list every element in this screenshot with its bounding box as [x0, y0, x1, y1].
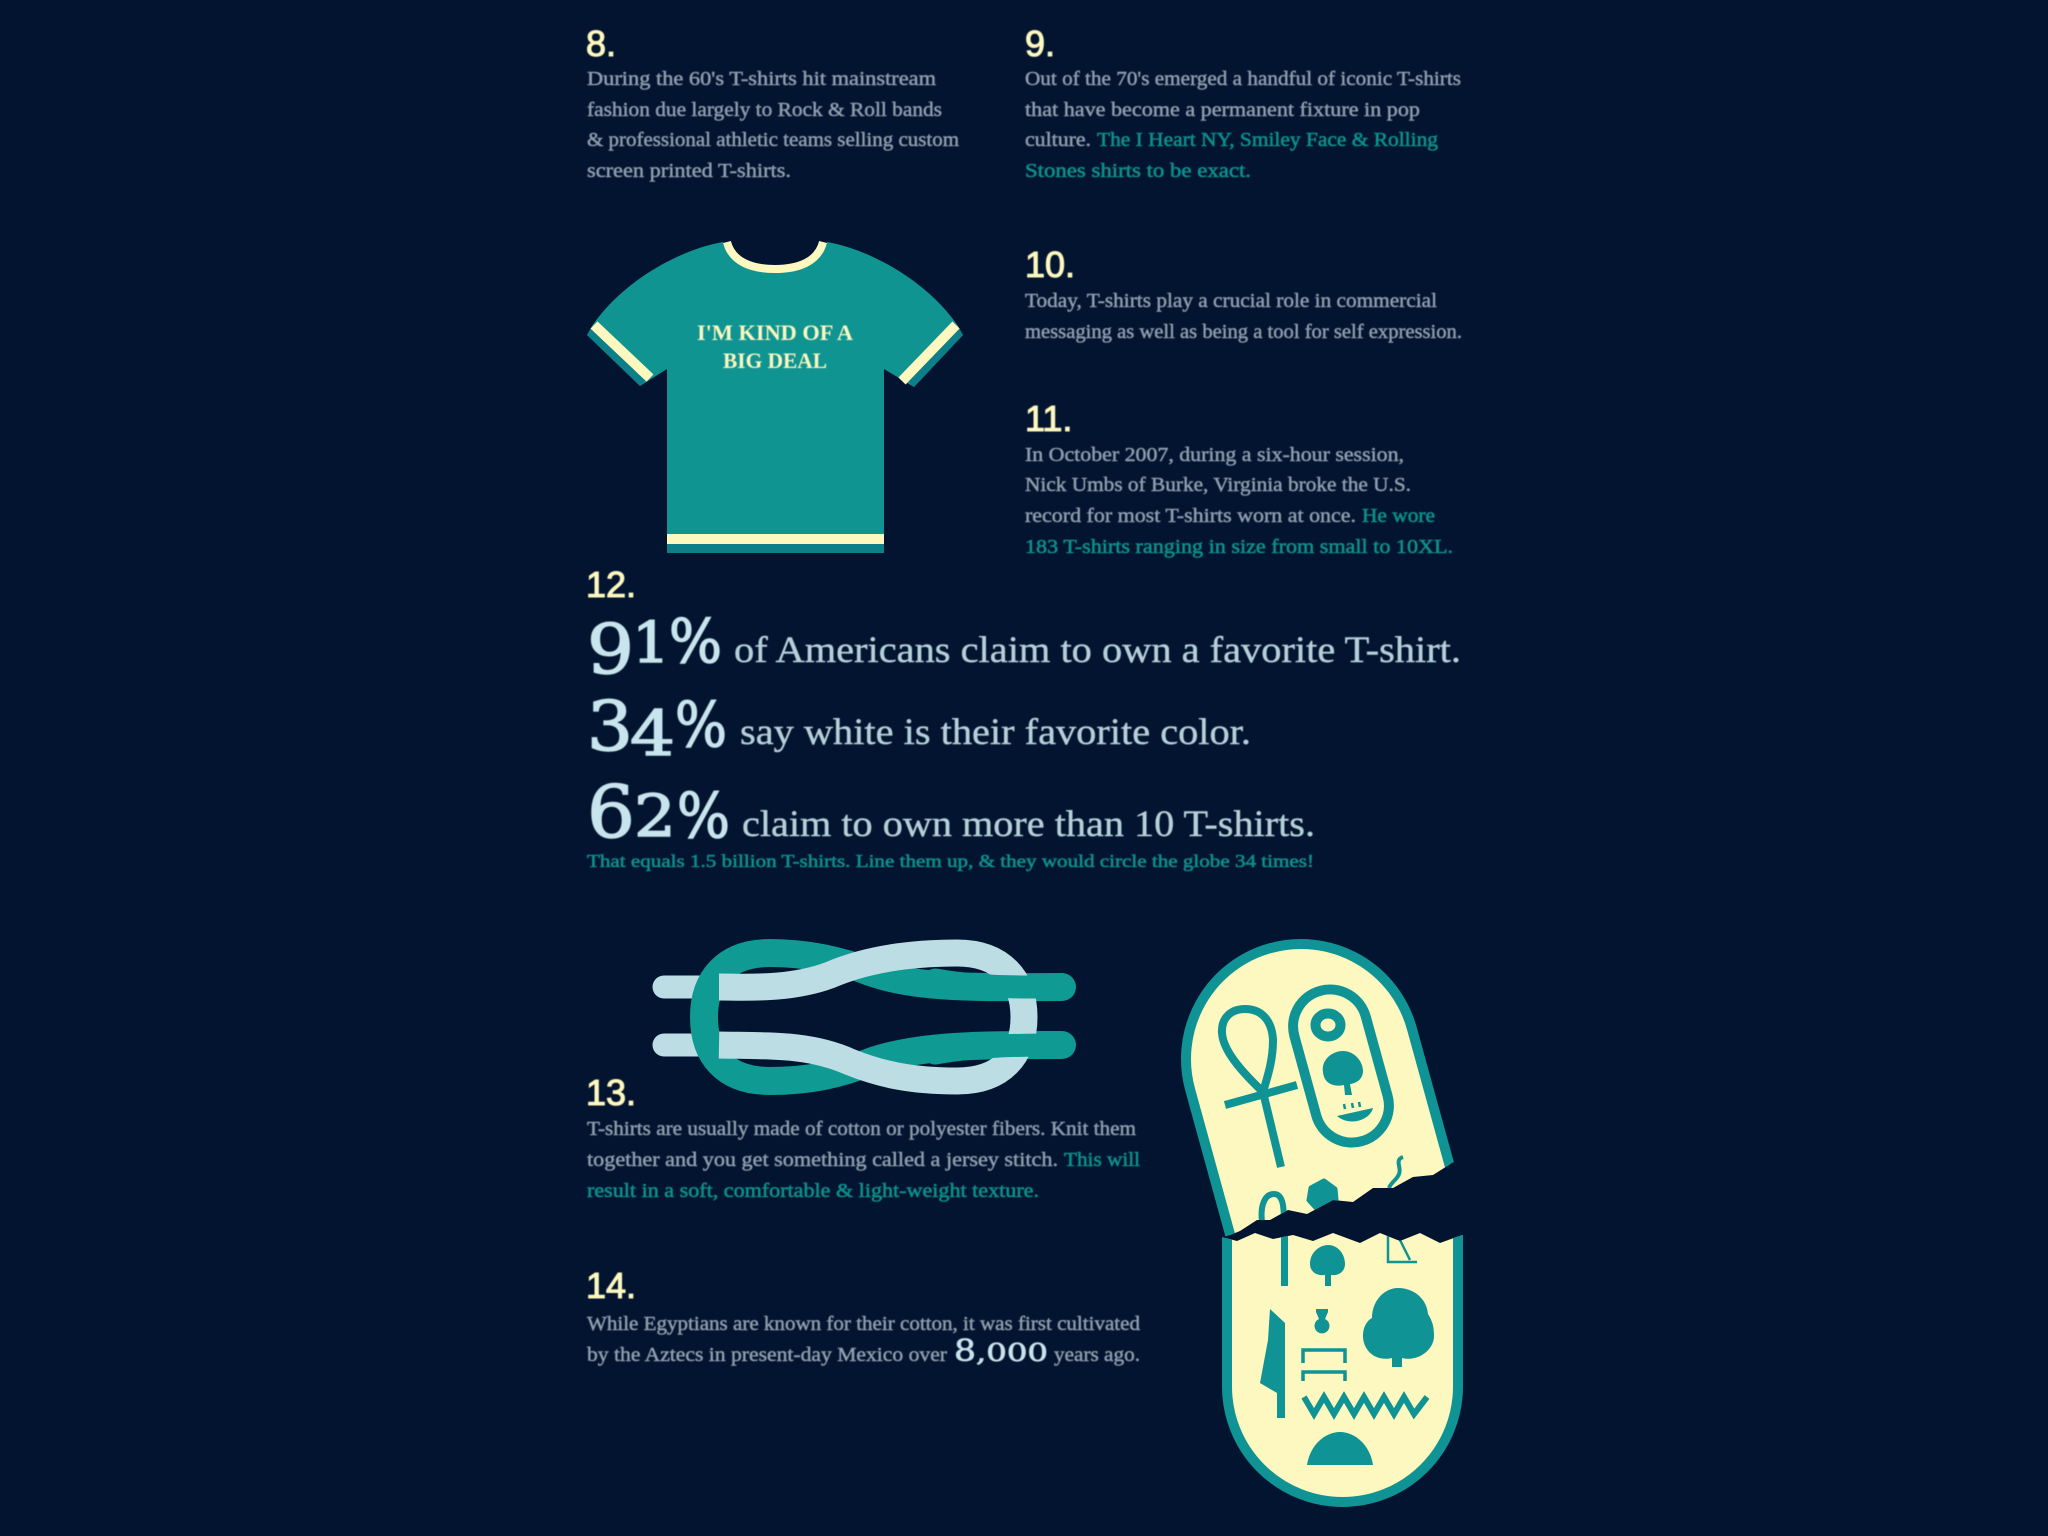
right cuff band	[908, 327, 963, 387]
left cuff band	[587, 327, 646, 386]
glyph: small tree in cartouche	[1323, 1051, 1363, 1095]
fact 12: statistics	[586, 564, 1461, 871]
shirt slogan: I'M KIND OF A	[697, 320, 853, 345]
text block: fact 13 body	[587, 1118, 1140, 1202]
glyph: inner cartouche	[1285, 981, 1397, 1151]
text block: fact 11 body: In October 2007, during a six-hour session,	[1025, 444, 1404, 466]
text block: fact 13 body: T-shirts are usually made of cotton or polyester fibers. Knit them	[587, 1118, 1136, 1140]
glyph: rock	[1309, 1181, 1336, 1212]
shirt body	[587, 242, 963, 553]
stat: 62%	[587, 770, 1315, 854]
fact 13	[586, 1072, 1140, 1202]
cartouche upper half	[1181, 939, 1454, 1236]
stat: 62%: %	[677, 779, 730, 852]
text block: fact 14 body: 8	[954, 1334, 976, 1369]
illustration: broken cartouche	[1181, 939, 1463, 1507]
heading: 9.: 9.	[1025, 23, 1055, 64]
fact 8	[586, 23, 959, 182]
teal loop	[704, 953, 1062, 1081]
illustration: square knot	[664, 953, 1062, 1081]
text block: fact 9 body	[1025, 68, 1461, 182]
stat: 34%: 3	[587, 688, 633, 767]
heading: 13.: 13.	[586, 1072, 636, 1113]
text block: fact 9 body: Out of the 70's emerged a handful of iconic T-shirts	[1025, 68, 1461, 90]
stat: 91%: 9	[587, 611, 634, 690]
heading: 10.: 10.	[1025, 244, 1075, 285]
glyph: boat	[1337, 1108, 1373, 1121]
hem shade	[667, 544, 884, 553]
light loop	[719, 953, 1024, 1081]
fact 9	[1025, 23, 1461, 182]
text block: fact 10 body: Today, T-shirts play a crucial role in commercial	[1025, 290, 1437, 312]
glyph: large tree	[1363, 1288, 1434, 1367]
text block: fact 14 body: by the Aztecs in present-day Mexico over	[587, 1344, 947, 1366]
text block: fact 9 body: culture.	[1025, 129, 1091, 151]
left strand ends	[664, 987, 725, 1045]
glyph: serpent	[1389, 1157, 1403, 1188]
glyph: sun ring	[1316, 1014, 1340, 1036]
glyph: vertical reed	[1281, 1236, 1288, 1286]
stat: 34%: say white is their favorite color.	[740, 712, 1251, 753]
stat: 62%: 6	[587, 770, 635, 854]
text block: fact 14 body: years ago.	[1054, 1344, 1140, 1366]
text block: fact 8 body	[587, 68, 959, 182]
text block: fact 8 body: fashion due largely to Rock & Roll bands	[587, 99, 942, 121]
cartouche lower half	[1222, 1233, 1463, 1507]
text block: fact 13 body: together and you get something called a jersey stitch.	[587, 1149, 1058, 1171]
heading: 12.: 12.	[586, 564, 636, 605]
heading: 8.: 8.	[586, 23, 616, 64]
fact 10	[1025, 244, 1462, 343]
text block: fact 14 body: ,000	[976, 1339, 1048, 1367]
text block: fact 11 body: 183 T-shirts ranging in size from small to 10XL.	[1025, 536, 1453, 558]
lower tablet	[1222, 1233, 1463, 1507]
shirt slogan	[697, 320, 853, 373]
glyph: small jar	[1315, 1309, 1330, 1333]
stat: 91%	[587, 607, 1461, 690]
teal strand ends	[935, 980, 1062, 1053]
stat: 91%: %	[669, 607, 722, 677]
collar	[727, 242, 823, 269]
glyph: seated legs	[1388, 1230, 1417, 1262]
glyph: ankh	[1222, 1009, 1297, 1167]
text block: fact 11 body: record for most T-shirts worn at once.	[1025, 505, 1356, 527]
text block: fact 8 body: During the 60's T-shirts hit mainstream	[587, 68, 936, 90]
text block: fact 10 body	[1025, 290, 1462, 343]
stat: 91%: 1	[632, 611, 670, 676]
glyph: water zigzag	[1304, 1397, 1427, 1414]
text block: fact 11 body: Nick Umbs of Burke, Virginia broke the U.S.	[1025, 474, 1411, 496]
upper tablet	[1181, 939, 1454, 1236]
text block: fact 14 body	[587, 1313, 1140, 1369]
text block: fact 10 body: messaging as well as being a tool for self expression.	[1025, 321, 1462, 343]
glyph: knife	[1260, 1309, 1285, 1418]
glyph: arch	[1262, 1194, 1284, 1225]
illustration: t-shirt	[587, 242, 963, 553]
stat: 62%: claim to own more than 10 T-shirts.	[742, 804, 1315, 845]
stat: 62%: 2	[634, 782, 676, 850]
text block: fact 9 body: that have become a permanent fixture in pop	[1025, 99, 1420, 121]
heading: 11.: 11.	[1025, 398, 1072, 439]
glyph: small tree	[1310, 1245, 1345, 1286]
glyph: half dome	[1307, 1432, 1373, 1465]
glyph: brackets	[1303, 1350, 1345, 1381]
stat: 34%: %	[675, 688, 727, 761]
fact 14	[586, 1265, 1140, 1369]
stat: 91%: of Americans claim to own a favorite T-shirt.	[734, 630, 1461, 671]
heading: 14.: 14.	[586, 1265, 636, 1306]
stat: 34%	[587, 688, 1251, 770]
hem stripe	[667, 534, 884, 544]
fact 11	[1025, 398, 1453, 558]
text block: fact 14 body: While Egyptians are known for their cotton, it was first cultivated	[587, 1313, 1140, 1335]
sleeve stripes	[594, 325, 956, 381]
glyph: offering dots	[1344, 1102, 1360, 1109]
text block: fact 8 body: & professional athletic teams selling custom	[587, 129, 959, 151]
text block: fact 13 body: This will	[1064, 1149, 1140, 1171]
text block: fact 8 body: screen printed T-shirts.	[587, 160, 791, 182]
text block: fact 11 body	[1025, 444, 1453, 558]
stat: 34%: 4	[630, 697, 675, 770]
text block: fact 9 body: Stones shirts to be exact.	[1025, 160, 1251, 182]
shirt slogan: BIG DEAL	[723, 348, 827, 373]
text block: fact 9 body: The I Heart NY, Smiley Face & Rolling	[1097, 129, 1438, 151]
text block: fact 13 body: result in a soft, comfortable & light-weight texture.	[587, 1180, 1039, 1202]
teal footnote: That equals 1.5 billion T-shirts. Line them up, & they would circle the globe 34 times!	[587, 851, 1314, 871]
text block: fact 11 body: He wore	[1362, 505, 1435, 527]
